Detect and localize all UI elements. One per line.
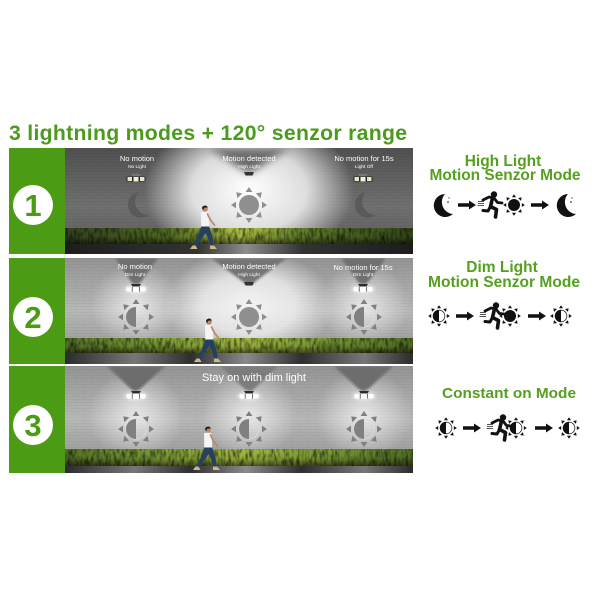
mode 2 number tab — [9, 258, 65, 364]
dim light heading: Motion Senzor Mode — [428, 274, 580, 291]
panel: mode 2 — [9, 250, 413, 364]
mode 1 number tab: 1 — [24, 188, 42, 223]
mode 1 captions: Light Off — [355, 164, 374, 170]
mode 1 number tab — [9, 148, 65, 254]
mode 1 captions: High Light — [238, 164, 260, 170]
mode 1 captions: Motion detected — [222, 154, 276, 163]
dim light heading: Dim Light — [466, 259, 538, 276]
legend: dim light — [428, 259, 580, 328]
mode 2 number tab: 2 — [24, 300, 42, 335]
mode 2 captions: Dim Light — [353, 272, 374, 278]
mode 3 number tab — [9, 366, 65, 473]
dim light heading — [428, 259, 580, 291]
constant on heading: Constant on Mode — [442, 385, 576, 402]
title: 3 lightning modes + 120° senzor range — [9, 122, 407, 145]
mode 1 captions — [120, 154, 394, 170]
high light heading — [430, 153, 581, 184]
mode 2 captions: No motion for 15s — [333, 263, 393, 272]
legend: constant on — [435, 385, 580, 440]
constant on sequence icons — [435, 414, 580, 440]
mode 3 number tab: 3 — [24, 408, 42, 443]
dim light sequence icons — [428, 302, 572, 328]
mode 2 captions — [118, 262, 393, 278]
legend: high light — [430, 153, 581, 217]
mode 1 captions: No motion — [120, 154, 154, 163]
mode 1 captions: No Light — [128, 164, 147, 170]
panel: mode 1 — [9, 148, 413, 254]
mode 1 scene — [65, 148, 413, 254]
mode 2 captions: Dim Light — [125, 272, 146, 278]
mode 3 caption: Stay on with dim light — [202, 372, 306, 384]
mode 2 captions: High Light — [238, 272, 260, 278]
mode 3 scene — [65, 366, 413, 473]
high light heading: Motion Senzor Mode — [430, 167, 581, 184]
high light sequence icons — [434, 191, 576, 217]
mode 2 scene — [65, 250, 413, 364]
panel: mode 3 — [9, 366, 413, 473]
mode 2 captions: Motion detected — [222, 262, 276, 271]
mode 1 captions: No motion for 15s — [334, 154, 394, 163]
high light heading: High Light — [465, 153, 541, 170]
mode 2 captions: No motion — [118, 262, 152, 271]
